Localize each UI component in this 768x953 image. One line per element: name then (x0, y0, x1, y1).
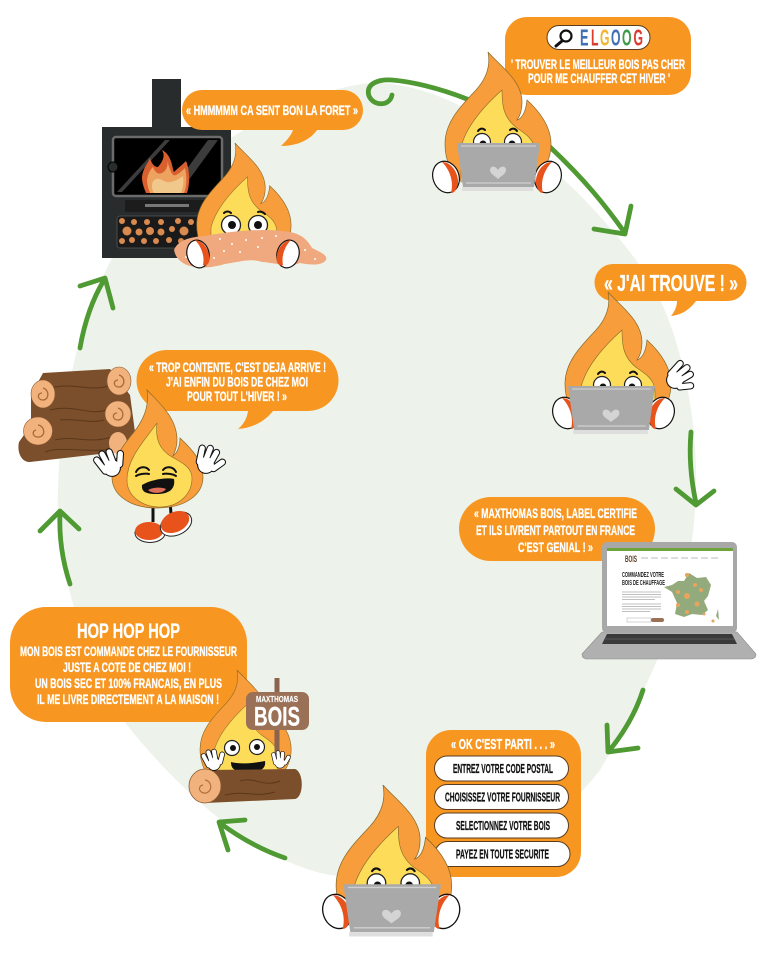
laughing mouth (142, 478, 174, 494)
character: flame with laptop, waving (548, 292, 697, 434)
character: flame with sign and log (189, 670, 309, 803)
search bar: E (580, 24, 588, 50)
character: happy jumping flame (95, 390, 225, 542)
shoes (184, 238, 302, 270)
arrow: found to website (676, 432, 714, 505)
search bar: O (611, 24, 620, 50)
speech bubble: certified supplier: C'EST GENIAL ! » (518, 539, 593, 555)
speech bubble: delivered (136, 350, 338, 429)
log end: behind flame (109, 432, 127, 454)
stove control bar (125, 200, 204, 212)
log end: middle right (105, 401, 131, 427)
website logo: BOIS (625, 554, 637, 564)
speech bubble: supplier: JUSTE A COTE DE CHEZ MOI ! (63, 660, 191, 675)
speech bubble: certified supplier: « MAXTHOMAS BOIS, LABEL CERTIFIE (474, 505, 637, 521)
speech bubble: search (505, 17, 691, 95)
step 1: ENTREZ VOTRE CODE POSTAL (453, 761, 553, 776)
website heading (622, 570, 665, 587)
speech bubble: delivered: J'AI ENFIN DU BOIS DE CHEZ MOI (166, 374, 308, 390)
step 3 (434, 813, 568, 838)
website laptop (582, 542, 756, 659)
background blob (58, 83, 696, 877)
log (189, 769, 302, 803)
log end: upper left (31, 380, 55, 408)
sign: MAXTHOMAS (256, 695, 299, 704)
eyes (224, 740, 264, 756)
speech bubble: supplier: HOP HOP HOP (77, 620, 180, 643)
stove fire (142, 150, 189, 193)
speech bubble: supplier: UN BOIS SEC ET 100% FRANCAIS, EN PLUS (35, 676, 222, 691)
wood stove (102, 79, 231, 258)
panel: order steps (426, 730, 581, 877)
search bar: O (622, 24, 632, 50)
arrow: order to supplier (219, 820, 285, 858)
character: flame in blanket (174, 143, 326, 270)
log end: lower left (24, 417, 52, 445)
closed eyes and brows (136, 467, 176, 476)
website search field (627, 618, 664, 622)
sign: BOIS (254, 702, 300, 732)
step 3: SELECTIONNEZ VOTRE BOIS (456, 818, 550, 833)
speech bubble: supplier: MON BOIS EST COMMANDE CHEZ LE FOURNISSEUR (20, 644, 237, 659)
speech bubble: delivered: POUR TOUT L'HIVER ! » (187, 389, 287, 404)
search text: POUR ME CHAUFFER CET HIVER ' (528, 71, 670, 86)
step 4 (435, 842, 570, 866)
search bar: G (600, 24, 610, 50)
speech bubble: smell of the forest: « HMMMMM CA SENT BON LA FORET » (186, 103, 358, 118)
step 4: PAYEZ EN TOUTE SECURITE (456, 846, 549, 862)
search text (511, 57, 685, 86)
sign (246, 678, 309, 763)
blanket (174, 230, 326, 267)
stove log store (117, 216, 201, 248)
speech bubble: supplier (10, 607, 247, 722)
arrow: supplier to delivery (40, 511, 79, 584)
stove window (108, 137, 222, 196)
character: flame with laptop, ordering (318, 785, 464, 937)
legs and shoes (135, 500, 196, 542)
log end: top right (107, 367, 131, 395)
eyes (222, 212, 268, 234)
character: flame with laptop, searching (428, 52, 566, 196)
speech bubble: delivered: « TROP CONTENTE, C'EST DEJA ARRIVE ! (149, 360, 326, 375)
speech bubble: smell of the forest (182, 90, 363, 146)
website heading: BOIS DE CHAUFFAGE (622, 578, 665, 587)
arrow: website to order (607, 690, 643, 752)
step 2: CHOISISSEZ VOTRE FOURNISSEUR (445, 790, 560, 804)
speech bubble: supplier: IL ME LIVRE DIRECTEMENT A LA MAISON ! (37, 692, 219, 707)
order title: « OK C'EST PARTI . . . » (451, 736, 555, 753)
step 1 (434, 756, 568, 781)
search bar (547, 24, 650, 50)
website heading: COMMANDEZ VOTRE (622, 570, 664, 579)
speech bubble: certified supplier: ET ILS LIVRENT PARTOUT EN FRANCE (476, 522, 635, 538)
speech bubble: found (594, 264, 746, 316)
search bar: L (591, 24, 598, 50)
speech bubble: certified supplier (459, 497, 655, 561)
step 2 (434, 784, 568, 810)
wood log pile (18, 367, 135, 462)
map of France (664, 573, 719, 622)
arrow: search to found (368, 80, 631, 234)
arrow: delivery to stove (80, 278, 113, 348)
search bar: G (634, 24, 643, 50)
